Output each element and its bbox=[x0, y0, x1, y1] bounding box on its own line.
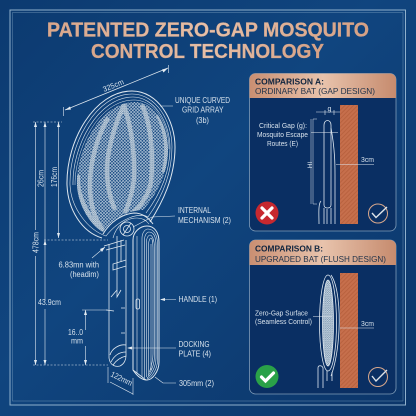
dimension labels: 478cm bbox=[32, 232, 40, 253]
dimension lines bbox=[33, 65, 176, 395]
dimension labels: 325cm bbox=[101, 77, 125, 94]
labels B: (Seamless Control) bbox=[255, 319, 312, 326]
gap dimension bbox=[311, 110, 374, 204]
dimension labels: 6.83mn with bbox=[58, 260, 99, 270]
callout labels: (3b) bbox=[196, 116, 209, 125]
callout labels: 305mm (2) bbox=[179, 379, 214, 388]
bat side view B bbox=[318, 275, 339, 388]
bat side view A bbox=[319, 120, 335, 224]
panel: comparison B bbox=[250, 240, 396, 394]
dimension labels: 43.9cm bbox=[38, 298, 61, 307]
header B: COMPARISON B: bbox=[255, 244, 323, 254]
wall B bbox=[340, 273, 358, 388]
dimension labels: (headim) bbox=[70, 270, 99, 279]
header B: UPGRADED BAT (FLUSH DESIGN) bbox=[255, 254, 386, 264]
icon: outline check B bbox=[368, 368, 388, 386]
callout labels bbox=[175, 96, 231, 388]
callout labels: DOCKING bbox=[178, 340, 210, 349]
labels A: Critical Gap (g): bbox=[259, 123, 307, 130]
labels B: 3cm bbox=[361, 319, 374, 328]
header B bbox=[250, 240, 396, 265]
racket diagram bbox=[66, 91, 175, 380]
callout labels: INTERNAL bbox=[178, 206, 211, 215]
leaders B bbox=[313, 316, 374, 328]
title: PATENTED ZERO-GAP MOSQUITO bbox=[47, 18, 369, 42]
dimension labels: mm bbox=[71, 336, 83, 346]
dimension labels: 16..0 bbox=[68, 328, 83, 337]
labels B: Zero-Gap Surface bbox=[255, 310, 308, 318]
header A: COMPARISON A: bbox=[255, 76, 324, 86]
dimension labels: 176cm bbox=[50, 167, 59, 187]
icon: outline check A bbox=[368, 204, 388, 223]
dimension arrowheads bbox=[34, 68, 168, 365]
callout labels: HANDLE (1) bbox=[178, 295, 217, 304]
neck mechanism bbox=[103, 213, 153, 250]
racket head bbox=[66, 91, 175, 238]
dimension labels bbox=[32, 77, 134, 388]
labels B bbox=[255, 310, 374, 328]
icon: red cross bbox=[256, 202, 278, 224]
dimension labels: 26cm bbox=[36, 170, 46, 187]
grid array stripes bbox=[76, 102, 168, 232]
callout labels: GRID ARRAY bbox=[182, 106, 224, 114]
panel: comparison A bbox=[250, 74, 396, 231]
handle bbox=[133, 226, 159, 380]
labels A: g bbox=[328, 106, 332, 113]
dimension labels: 122mm bbox=[109, 370, 134, 388]
labels A: 3cm bbox=[361, 155, 374, 164]
icon: green check bbox=[256, 365, 278, 388]
callout labels: PLATE (4) bbox=[178, 350, 211, 358]
wall A bbox=[340, 105, 358, 224]
header A: ORDINARY BAT (GAP DESIGN) bbox=[255, 86, 375, 96]
callout labels: UNIQUE CURVED bbox=[175, 96, 230, 105]
labels A bbox=[257, 106, 374, 168]
title: CONTROL TECHNOLOGY bbox=[91, 40, 324, 63]
header A bbox=[250, 74, 396, 98]
title bbox=[47, 18, 369, 63]
callout labels: MECHANISM (2) bbox=[178, 216, 231, 225]
labels A: Hl bbox=[307, 161, 314, 168]
docking rod bbox=[106, 236, 126, 366]
labels A: Mosquito Escape bbox=[257, 132, 308, 139]
labels A: Routes (E) bbox=[267, 141, 298, 148]
